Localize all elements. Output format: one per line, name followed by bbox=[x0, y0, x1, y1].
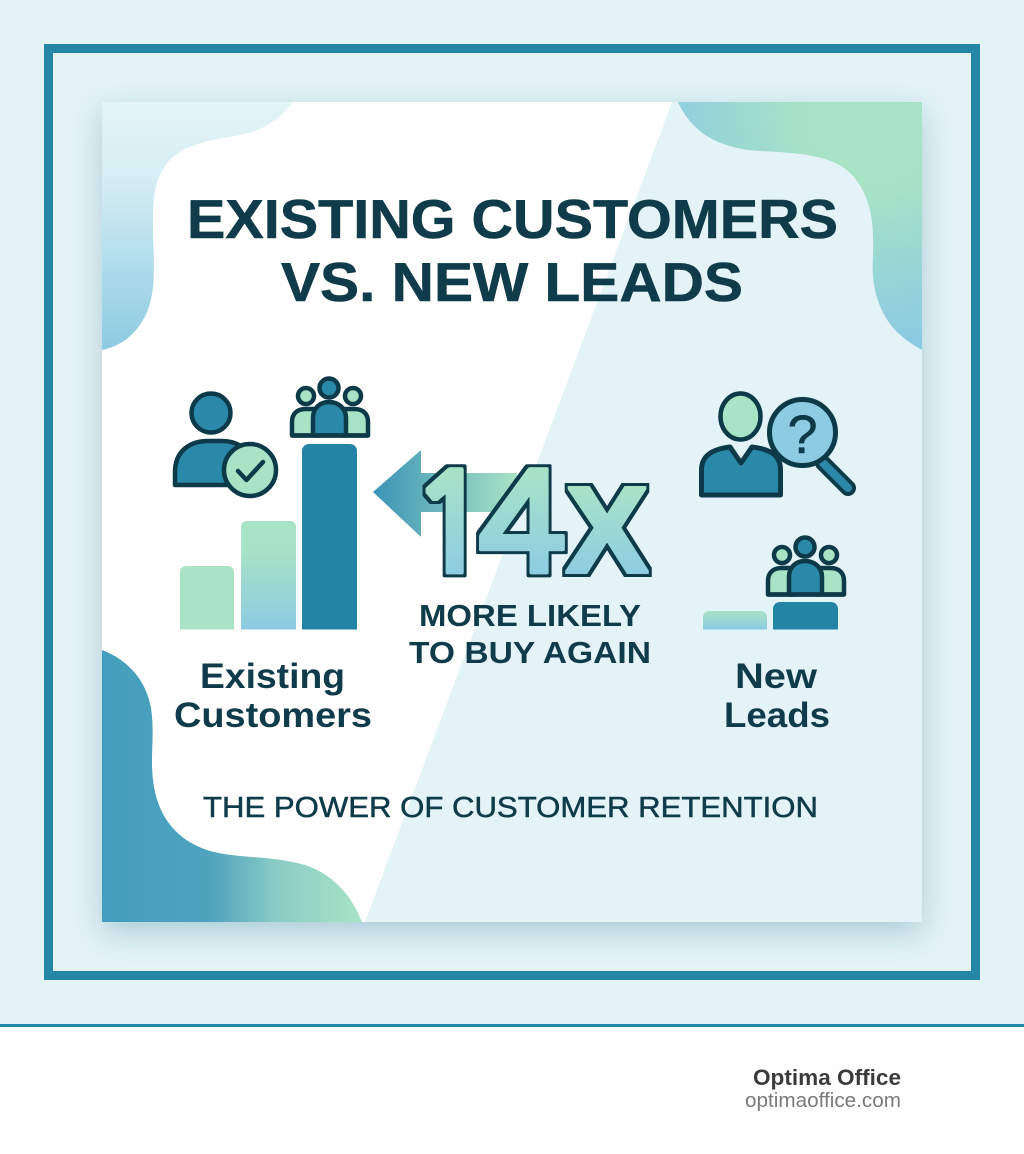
card base, light right side bbox=[102, 102, 922, 922]
caption: more likely to buy again: MORE LIKELY bbox=[419, 598, 641, 633]
blob: top right bbox=[678, 102, 922, 350]
question mark: ? bbox=[787, 405, 818, 465]
icon: customer group bbox=[292, 378, 368, 436]
title: EXISTING CUSTOMERS bbox=[187, 188, 838, 250]
footer brand: Optima Office bbox=[753, 1065, 901, 1090]
footer band bbox=[0, 1024, 1024, 1154]
label: existing customers: Existing bbox=[200, 657, 345, 696]
footer brand: optimaoffice.com bbox=[745, 1090, 901, 1112]
bar chart: existing customers bbox=[180, 444, 357, 630]
arrow pointing left bbox=[373, 450, 517, 537]
caption: more likely to buy again bbox=[409, 598, 651, 670]
label: new leads: New bbox=[735, 657, 818, 696]
title: VS. NEW LEADS bbox=[281, 251, 743, 313]
icon: lead with magnifier bbox=[702, 394, 848, 495]
panel: existing customers bbox=[174, 378, 372, 735]
bar chart: new leads bbox=[703, 602, 838, 630]
footer brand bbox=[745, 1065, 901, 1112]
big number 14x: 4 bbox=[476, 458, 568, 594]
icon: customer with check bbox=[175, 394, 276, 496]
panel: new leads bbox=[702, 394, 848, 735]
big number 14x: 1 bbox=[409, 458, 494, 594]
title bbox=[187, 188, 838, 313]
label: new leads bbox=[724, 657, 830, 735]
blob: top left bbox=[102, 102, 292, 350]
blob: bottom left bbox=[102, 650, 362, 922]
big number 14x: X bbox=[566, 462, 648, 600]
panel: main card bbox=[102, 102, 922, 922]
label: new leads: Leads bbox=[724, 696, 830, 735]
caption: more likely to buy again: TO BUY AGAIN bbox=[409, 635, 651, 670]
label: existing customers bbox=[174, 657, 372, 735]
tagline: THE POWER OF CUSTOMER RETENTION bbox=[203, 792, 818, 824]
icon: lead group bbox=[768, 538, 844, 594]
outer frame bbox=[48, 48, 976, 976]
label: existing customers: Customers bbox=[174, 696, 372, 735]
panel: 14x callout bbox=[373, 450, 651, 670]
big number 14x bbox=[409, 458, 648, 600]
white diagonal left side bbox=[102, 102, 672, 922]
